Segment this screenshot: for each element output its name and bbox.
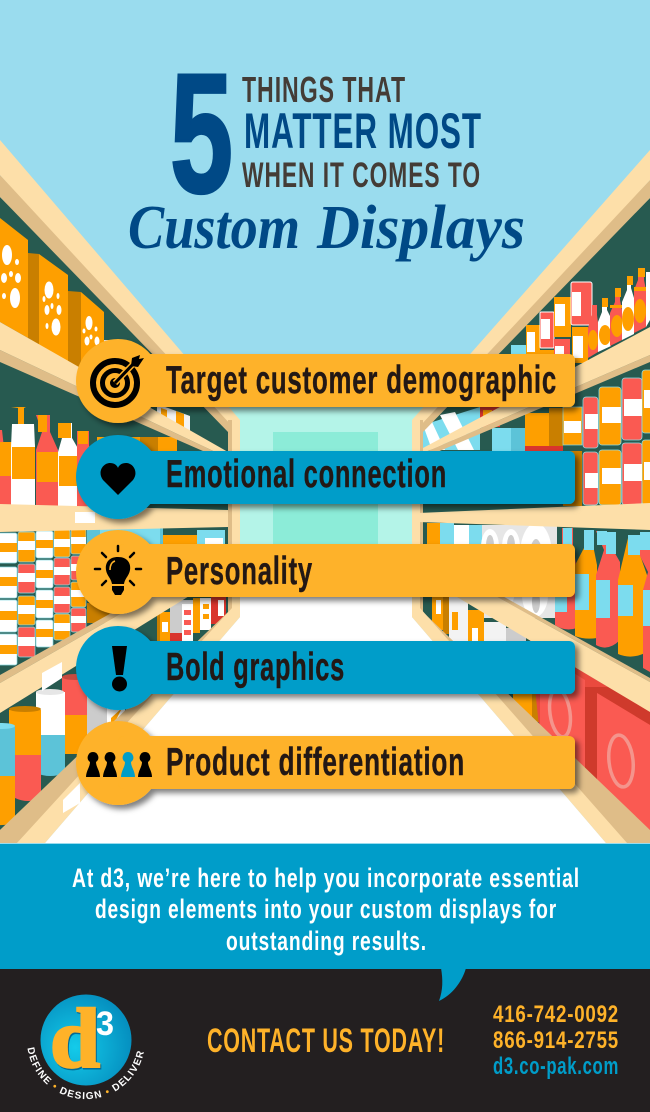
- title numeral: 5: [170, 39, 233, 229]
- label: Product differentiation: [166, 741, 465, 784]
- logo: 3: [96, 1005, 114, 1043]
- left upper boxes: [0, 218, 112, 385]
- right lower bottles: [555, 528, 650, 672]
- left wall: [0, 197, 228, 830]
- title line: when it comes to: WHEN IT COMES TO: [242, 156, 481, 195]
- left mid boxes: [87, 596, 226, 642]
- back wall: [228, 390, 424, 605]
- panel: footer: [0, 969, 650, 1112]
- left lower cylinders: [0, 674, 125, 825]
- icon: heart: [101, 463, 135, 495]
- callout: target customer demographic: [76, 339, 575, 423]
- shelf: right frame: [412, 415, 650, 843]
- left shelf cans: [0, 529, 86, 665]
- title script: displays: Displays: [316, 194, 525, 262]
- left back boxes: [87, 404, 225, 548]
- logo: DEFINE • DESIGN • DELIVER: [28, 1047, 144, 1100]
- left can bands: [0, 537, 86, 654]
- left bottles: [0, 407, 177, 510]
- message text: [72, 863, 580, 956]
- logo: [28, 992, 144, 1100]
- title script: custom: Custom: [128, 194, 300, 262]
- label: Personality: [166, 550, 313, 593]
- callout: bold graphics: [76, 626, 575, 710]
- shelf: left boards: [0, 322, 228, 813]
- title: [128, 39, 525, 262]
- right middle cans: [423, 370, 650, 506]
- right wall: [423, 198, 650, 830]
- title line: matter most: MATTER MOST: [244, 103, 482, 159]
- contact details: [493, 1001, 619, 1080]
- label: Emotional connection: [166, 453, 447, 496]
- right under-shelf boxes: [432, 596, 443, 630]
- logo: d: [51, 994, 101, 1088]
- icon: light bulb: [95, 546, 141, 595]
- contact details: 866-914-2755: [493, 1027, 619, 1054]
- icon: game pawns: [86, 752, 152, 777]
- contact call to action: CONTACT US TODAY!: [207, 1022, 445, 1060]
- callout: product differentiation: [76, 721, 575, 805]
- message text: outstanding results.: [226, 926, 427, 956]
- floor: [45, 597, 606, 843]
- callout: emotional connection: [76, 435, 575, 519]
- logo: d: [50, 992, 100, 1086]
- icon: exclamation mark: [112, 646, 127, 692]
- shelf: left top beam: [0, 140, 240, 432]
- contact details: 416-742-0092: [493, 1001, 619, 1028]
- callouts: [76, 339, 575, 805]
- label: Bold graphics: [166, 646, 345, 689]
- right upper boxes and bottles: [511, 268, 650, 365]
- shelf: right top beam: [412, 150, 650, 432]
- right lower shelf products: [427, 523, 650, 830]
- title line: things that: THINGS THAT: [242, 69, 406, 110]
- speech bubble tail: [439, 968, 466, 1001]
- panel: message band: [0, 844, 650, 969]
- callout: personality: [76, 530, 575, 614]
- background: sky: [0, 0, 650, 850]
- shelf: right boards: [418, 327, 650, 712]
- shelf: left frame: [0, 415, 240, 843]
- icon: target: [93, 355, 144, 405]
